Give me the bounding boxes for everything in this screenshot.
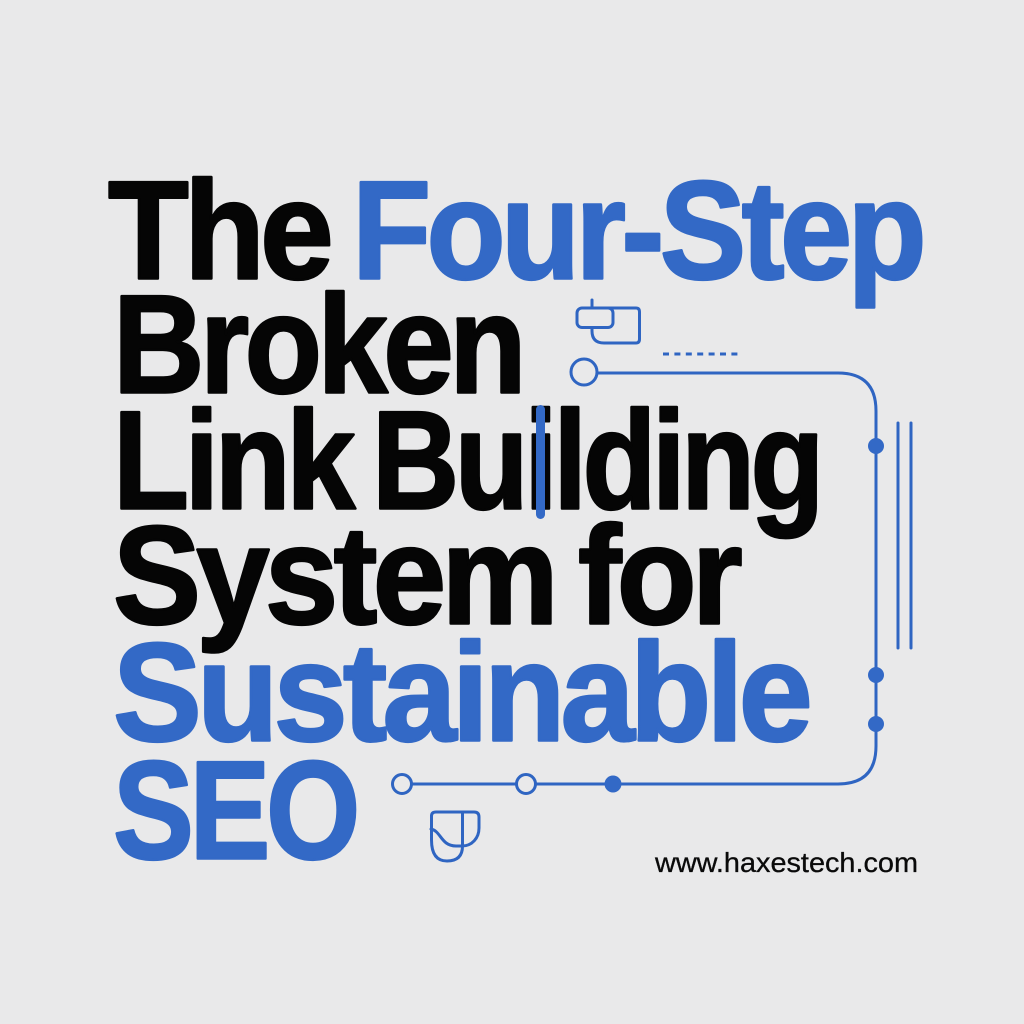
title: The bbox=[108, 152, 330, 308]
title: Sustainable bbox=[113, 614, 809, 770]
icon: shield shape bbox=[431, 812, 479, 861]
title: Link bbox=[113, 382, 356, 538]
double vertical lines bbox=[898, 423, 911, 648]
title bbox=[108, 152, 922, 888]
connector circuit line bbox=[392, 359, 884, 794]
icon: overlapping rectangles bbox=[577, 300, 640, 343]
title: System bbox=[113, 496, 554, 654]
title: Four-Step bbox=[352, 152, 922, 308]
title: Broken bbox=[113, 266, 522, 422]
blue bar over the letter i bbox=[536, 405, 545, 519]
dashed line bbox=[663, 352, 738, 356]
title: Building bbox=[372, 382, 820, 538]
website url: www.haxestech.com bbox=[654, 847, 918, 878]
title: SEO bbox=[113, 732, 356, 888]
title: for bbox=[578, 496, 741, 654]
